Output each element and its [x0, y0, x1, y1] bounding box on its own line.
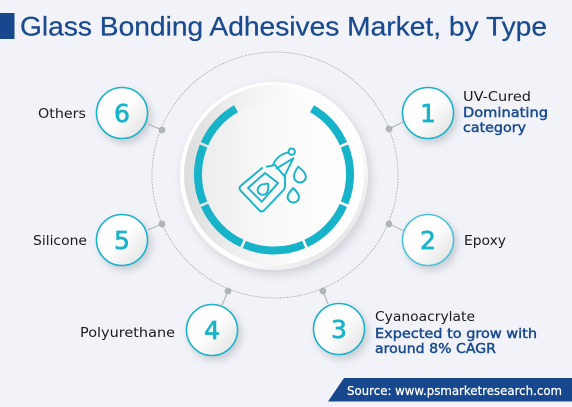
item 6: Others — [38, 88, 148, 138]
source banner — [328, 378, 572, 402]
title marker — [0, 13, 14, 39]
item 5: Silicone: Silicone — [33, 234, 87, 249]
icon: glue bottle with drops — [240, 148, 306, 212]
item 2: Epoxy — [402, 214, 506, 266]
item 1: UV-Cured: category — [463, 121, 526, 136]
segmented teal ring — [198, 109, 350, 251]
item 6: Others: Others — [38, 107, 86, 122]
item 4: Polyurethane — [80, 304, 238, 356]
item 3: Cyanoacrylate: 3 — [331, 315, 347, 344]
center disc — [180, 82, 368, 270]
item 3: Cyanoacrylate: around 8% CAGR — [375, 342, 496, 357]
item 5: Silicone: 5 — [114, 226, 130, 255]
item 3: Cyanoacrylate: Expected to grow with — [375, 327, 537, 342]
item 1: UV-Cured — [402, 88, 548, 138]
item 1: UV-Cured: Dominating — [463, 106, 548, 121]
item 4: Polyurethane: Polyurethane — [80, 326, 175, 341]
item 1: UV-Cured: UV-Cured — [463, 90, 531, 105]
item 4: Polyurethane: 4 — [204, 316, 220, 345]
item 6: Others: 6 — [114, 99, 130, 128]
item 2: Epoxy: Epoxy — [464, 234, 506, 249]
item 2: Epoxy: 2 — [420, 226, 436, 255]
item 1: UV-Cured: 1 — [420, 99, 436, 128]
item 3: Cyanoacrylate — [314, 304, 537, 357]
item 5: Silicone — [33, 214, 148, 266]
item 3: Cyanoacrylate: Cyanoacrylate — [375, 310, 475, 325]
title: Glass Bonding Adhesives Market, by Type — [20, 12, 547, 42]
source banner: Source: www.psmarketresearch.com — [347, 383, 562, 398]
orbit ring with connectors — [148, 52, 404, 305]
